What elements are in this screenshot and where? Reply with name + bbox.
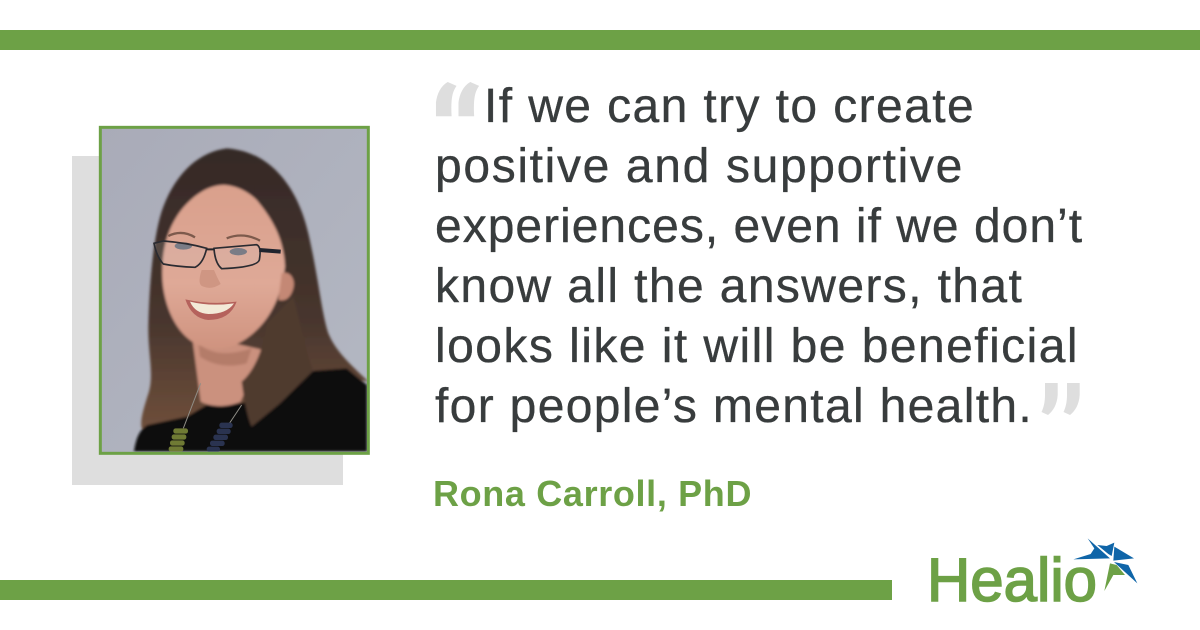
quote text: positive and supportive [435,140,964,193]
Healio logo: Healio [927,546,1097,614]
glasses [154,241,260,269]
quote text [435,80,1083,433]
attribution: Rona Carroll, PhD [433,473,752,514]
quote text: know all the answers, that [435,260,1023,313]
opening quotation mark [436,82,479,116]
portrait photo [98,126,370,455]
quote text: If we can try to create [484,80,975,133]
closing quotation mark [1042,383,1080,415]
eyebrows, eyes, nose, mouth [168,233,195,237]
quote text: for people’s mental health. [435,380,1033,433]
top green bar [0,30,1200,50]
quote text: looks like it will be beneficial [435,320,1079,373]
quote text: experiences, even if we don’t [435,200,1083,253]
grey offset panel behind photo [72,156,343,485]
necklace [183,383,242,428]
bottom green bar [0,580,892,600]
